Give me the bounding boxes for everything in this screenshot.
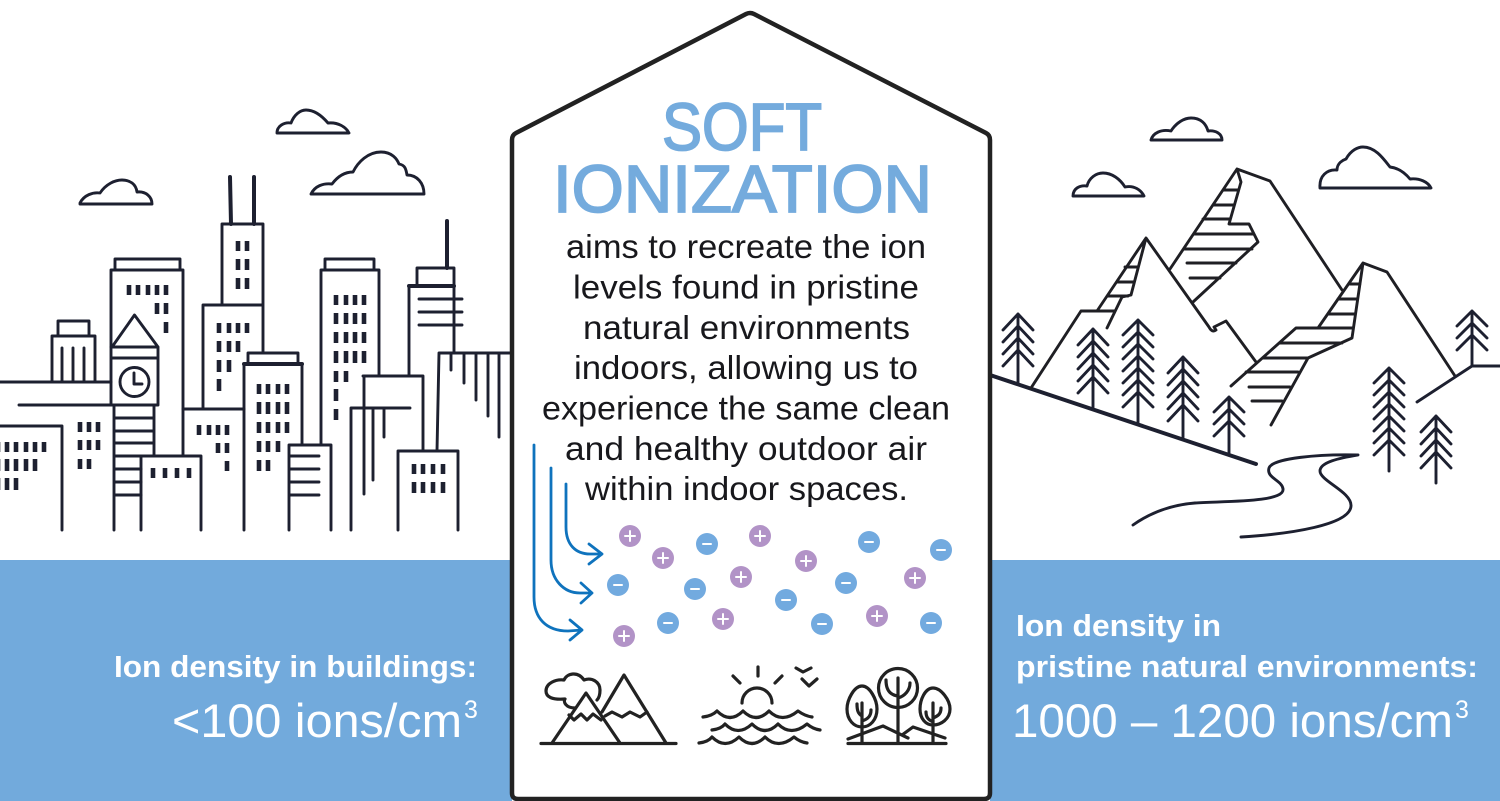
body text: experience the same clean <box>542 390 950 426</box>
river <box>1133 455 1358 537</box>
left stat: ion density in buildings <box>114 649 478 747</box>
body text: natural environments <box>583 309 910 346</box>
illustration: mountains <box>990 118 1500 537</box>
icon: sun over water <box>699 667 820 744</box>
antenna tower <box>409 221 462 376</box>
right block with windows <box>398 451 458 530</box>
left stat: ion density in buildings: <100 ions/cm <box>172 694 462 747</box>
clock tower <box>111 315 158 530</box>
negative ions <box>607 531 952 635</box>
tall tower with antennas <box>203 177 263 409</box>
clouds <box>1073 118 1431 196</box>
right stat: ion density in pristine environments: 3 <box>1455 696 1469 724</box>
mountain: front left <box>1031 238 1256 388</box>
body text: aims to recreate the ion <box>566 228 926 265</box>
right hillside <box>1417 366 1500 402</box>
airflow arrows <box>534 445 602 640</box>
cloud: small left <box>80 180 152 204</box>
title: IONIZATION <box>553 152 932 227</box>
title: SOFT <box>662 90 822 165</box>
ground line <box>990 375 1256 464</box>
body text: levels found in pristine <box>573 268 919 306</box>
high-rise <box>321 259 379 445</box>
blue band: left <box>0 560 512 801</box>
right stat: ion density in pristine environments <box>1012 608 1478 747</box>
cloud: large <box>311 152 424 194</box>
positive ions <box>613 525 926 647</box>
mountain: right peak <box>1231 263 1455 425</box>
lower centre buildings <box>141 409 244 530</box>
cloud: small top <box>277 110 349 133</box>
building with drip lines <box>437 353 510 451</box>
right stat: ion density in pristine environments: 1000 – 1200 ions/cm <box>1012 694 1453 747</box>
mid tower <box>244 353 302 530</box>
left stat: ion density in buildings: Ion density in buildings: <box>114 649 477 684</box>
mountain: back peak <box>1170 169 1342 302</box>
body text: and healthy outdoor air <box>565 430 927 467</box>
left low buildings <box>0 321 111 530</box>
title <box>553 90 932 227</box>
striped block <box>289 445 331 530</box>
right stat: ion density in pristine environments: Ion density in <box>1016 608 1221 643</box>
body text <box>542 228 950 507</box>
right stat: ion density in pristine environments: pristine natural environments: <box>1016 649 1478 684</box>
illustration: city skyline <box>0 110 510 530</box>
overlapping blocks <box>351 376 423 530</box>
body text: within indoor spaces. <box>584 470 908 507</box>
left stat: ion density in buildings: 3 <box>464 696 478 724</box>
plus and minus signs <box>614 531 945 641</box>
pine trees <box>1003 311 1487 483</box>
icon: trees <box>847 668 950 744</box>
icon: mountains and cloud <box>541 674 676 744</box>
house panel <box>512 13 990 799</box>
body text: indoors, allowing us to <box>574 349 918 386</box>
building behind clock tower <box>111 259 183 456</box>
blue band: right <box>990 560 1500 801</box>
ions <box>607 525 952 647</box>
